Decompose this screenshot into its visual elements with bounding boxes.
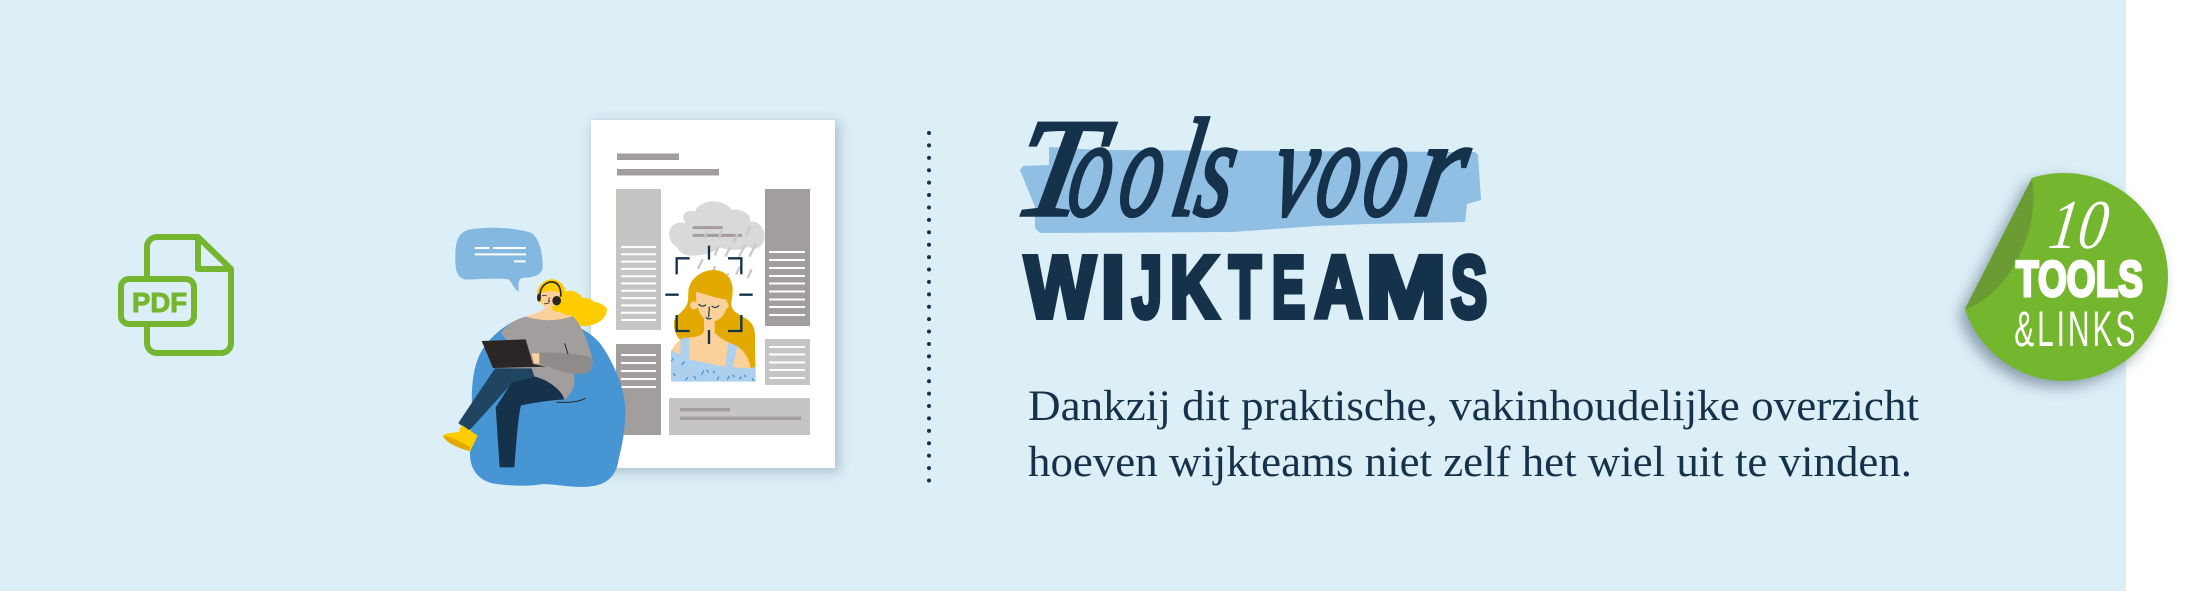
lower left block [616, 344, 661, 435]
heading script: v [1263, 90, 1332, 246]
heading script: o [1059, 90, 1128, 246]
badge LINKS: &LINKS [2014, 301, 2135, 357]
description [1028, 383, 1919, 486]
laptop [482, 339, 546, 368]
heading script: o [1307, 90, 1376, 246]
speech bubble [455, 228, 543, 292]
heading script: o [1110, 90, 1179, 246]
title: WIJKTEAMS: T [1229, 239, 1261, 336]
title: WIJKTEAMS: E [1272, 239, 1305, 336]
sweater [501, 316, 593, 399]
page shadow [593, 122, 839, 472]
icon: PDF document: PDF [132, 287, 187, 318]
title: WIJKTEAMS: W [1025, 239, 1096, 336]
title: WIJKTEAMS: I [1101, 239, 1125, 336]
face [696, 292, 727, 322]
lower right block [765, 339, 810, 385]
dress [671, 350, 756, 382]
neck and chest [527, 307, 573, 320]
right column block [765, 189, 810, 326]
left column block [616, 189, 661, 330]
boot [443, 425, 478, 451]
page sheet [591, 120, 835, 468]
dotted divider [927, 133, 931, 481]
heading script: o [1354, 90, 1423, 246]
arm [539, 353, 593, 374]
head [541, 291, 560, 308]
description: Dankzij dit praktische, vakinhoudelijke overzicht [1028, 383, 1919, 430]
shoulders and neck [671, 318, 751, 369]
title: Tools voor [1004, 90, 1482, 246]
back leg [458, 368, 535, 432]
hair [537, 279, 607, 326]
title: WIJKTEAMS: K [1170, 239, 1218, 336]
icon: PDF document [121, 237, 231, 353]
headset [540, 282, 561, 297]
rain cloud [669, 201, 765, 288]
description: hoeven wijkteams niet zelf het wiel uit te vinden. [1028, 439, 1912, 486]
title: WIJKTEAMS: M [1366, 239, 1446, 336]
heading script: l [1163, 90, 1216, 246]
bean bag [470, 316, 625, 487]
front leg [496, 377, 564, 467]
illustration: woman with laptop on bean bag [443, 228, 625, 487]
brush highlight [1020, 147, 1481, 233]
document page illustration [591, 120, 839, 472]
title: WIJKTEAMS: J [1132, 239, 1162, 336]
heading script: r [1406, 90, 1482, 246]
peeled corner [1965, 178, 2033, 309]
creases [557, 343, 585, 402]
focus brackets [665, 246, 753, 344]
hand [532, 353, 540, 363]
badge shadow [1959, 179, 2162, 387]
hair [674, 270, 756, 368]
title: WIJKTEAMS: A [1315, 239, 1362, 336]
badge disc [1965, 173, 2168, 381]
bottom block [669, 398, 810, 435]
sticker badge [1959, 173, 2168, 387]
heading script: T [1004, 90, 1122, 246]
heading script: s [1187, 90, 1250, 246]
badge TOOLS: TOOLS [2016, 251, 2143, 307]
badge number: 10 [2045, 186, 2114, 264]
page title bars [617, 154, 719, 176]
illustration: woman under rain cloud [665, 201, 765, 382]
title: WIJKTEAMS: S [1451, 239, 1487, 336]
